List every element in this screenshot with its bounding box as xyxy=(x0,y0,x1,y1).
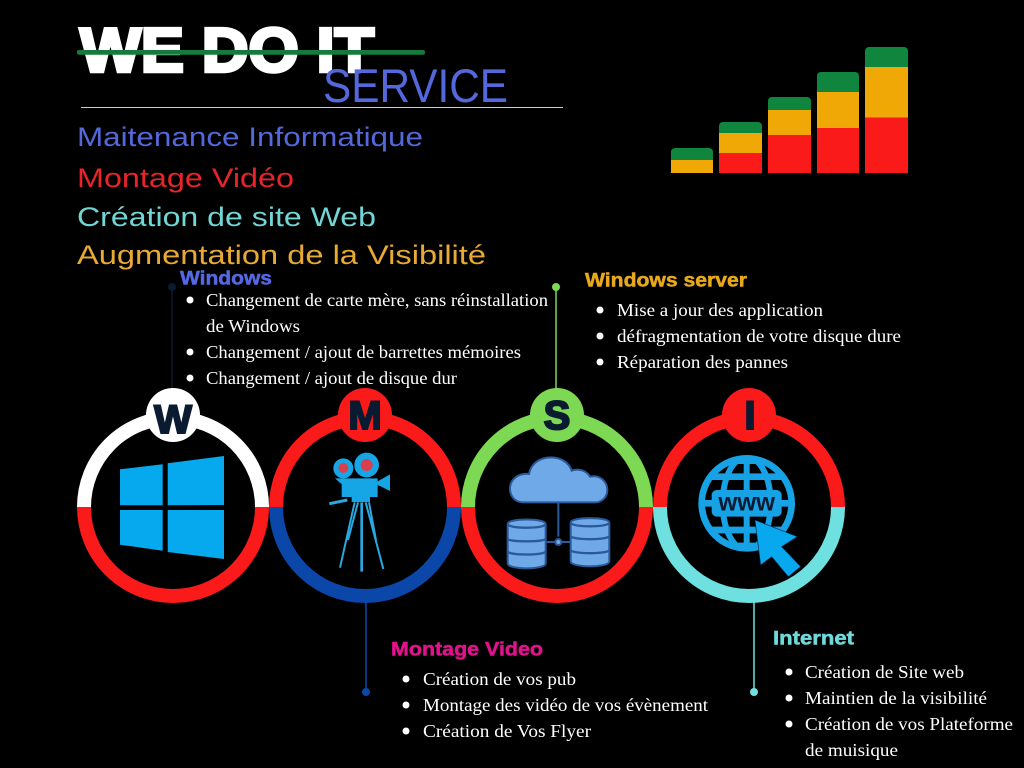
text block: Montage Video: Création de vos pub xyxy=(423,669,576,689)
service list: Montage Vidéo xyxy=(77,163,294,193)
ring M xyxy=(276,388,454,596)
text block: Windows server: défragmentation de votre disque dure xyxy=(617,326,901,346)
title: WE DO IT with strike line: WE DO IT xyxy=(80,16,374,86)
text block: Windows xyxy=(180,268,548,388)
ring W: W xyxy=(154,398,192,442)
text block: Windows server: Windows server xyxy=(585,270,747,292)
text block: Internet: Maintien de la visibilité xyxy=(805,688,987,708)
text block: Internet: Création de Site web xyxy=(805,662,964,682)
stacked bar chart xyxy=(671,47,908,173)
icon: film camera on tripod xyxy=(329,453,390,572)
text block: Windows: Changement / ajout de barrettes mémoires xyxy=(206,342,521,362)
icon: globe with www and cursor: www xyxy=(717,489,775,517)
text block: Windows server: Réparation des pannes xyxy=(617,352,788,372)
icon: Windows logo xyxy=(120,456,224,559)
leader line: Windows xyxy=(168,283,176,392)
leader line: Montage Video xyxy=(362,600,370,696)
text block: Internet: de muisique xyxy=(805,740,898,760)
service list: Création de site Web xyxy=(77,202,376,232)
text block: Windows: de Windows xyxy=(206,316,300,336)
leader line: Windows server xyxy=(552,283,560,392)
text block: Windows: Changement / ajout de disque dur xyxy=(206,368,457,388)
icon: cloud and databases xyxy=(508,457,609,568)
text block: Internet: Internet xyxy=(773,628,855,650)
text block: Windows: Windows xyxy=(180,268,272,290)
text block: Montage Video xyxy=(391,638,708,741)
ring M: M xyxy=(348,394,382,438)
text block: Windows server: Mise a jour des application xyxy=(617,300,823,320)
text block: Internet: Création de vos Plateforme xyxy=(805,714,1013,734)
ring I xyxy=(660,388,838,596)
text block: Windows server xyxy=(585,270,901,372)
text block: Internet xyxy=(773,628,1013,760)
leader line: Internet xyxy=(750,600,758,696)
text block: Montage Video: Montage Video xyxy=(391,638,543,660)
ring S xyxy=(468,388,646,596)
ring I: I xyxy=(744,394,756,438)
service list: Maitenance Informatique xyxy=(77,122,423,152)
service list: Augmentation de la Visibilité xyxy=(77,240,486,270)
service list xyxy=(77,122,486,270)
icon: globe with www and cursor xyxy=(697,455,801,577)
subtitle: SERVICE: SERVICE xyxy=(323,59,508,112)
text block: Montage Video: Création de Vos Flyer xyxy=(423,721,591,741)
ring W xyxy=(84,388,262,596)
text block: Montage Video: Montage des vidéo de vos évènement xyxy=(423,695,708,715)
text block: Windows: Changement de carte mère, sans réinstallation xyxy=(206,290,548,310)
ring S: S xyxy=(544,394,570,438)
